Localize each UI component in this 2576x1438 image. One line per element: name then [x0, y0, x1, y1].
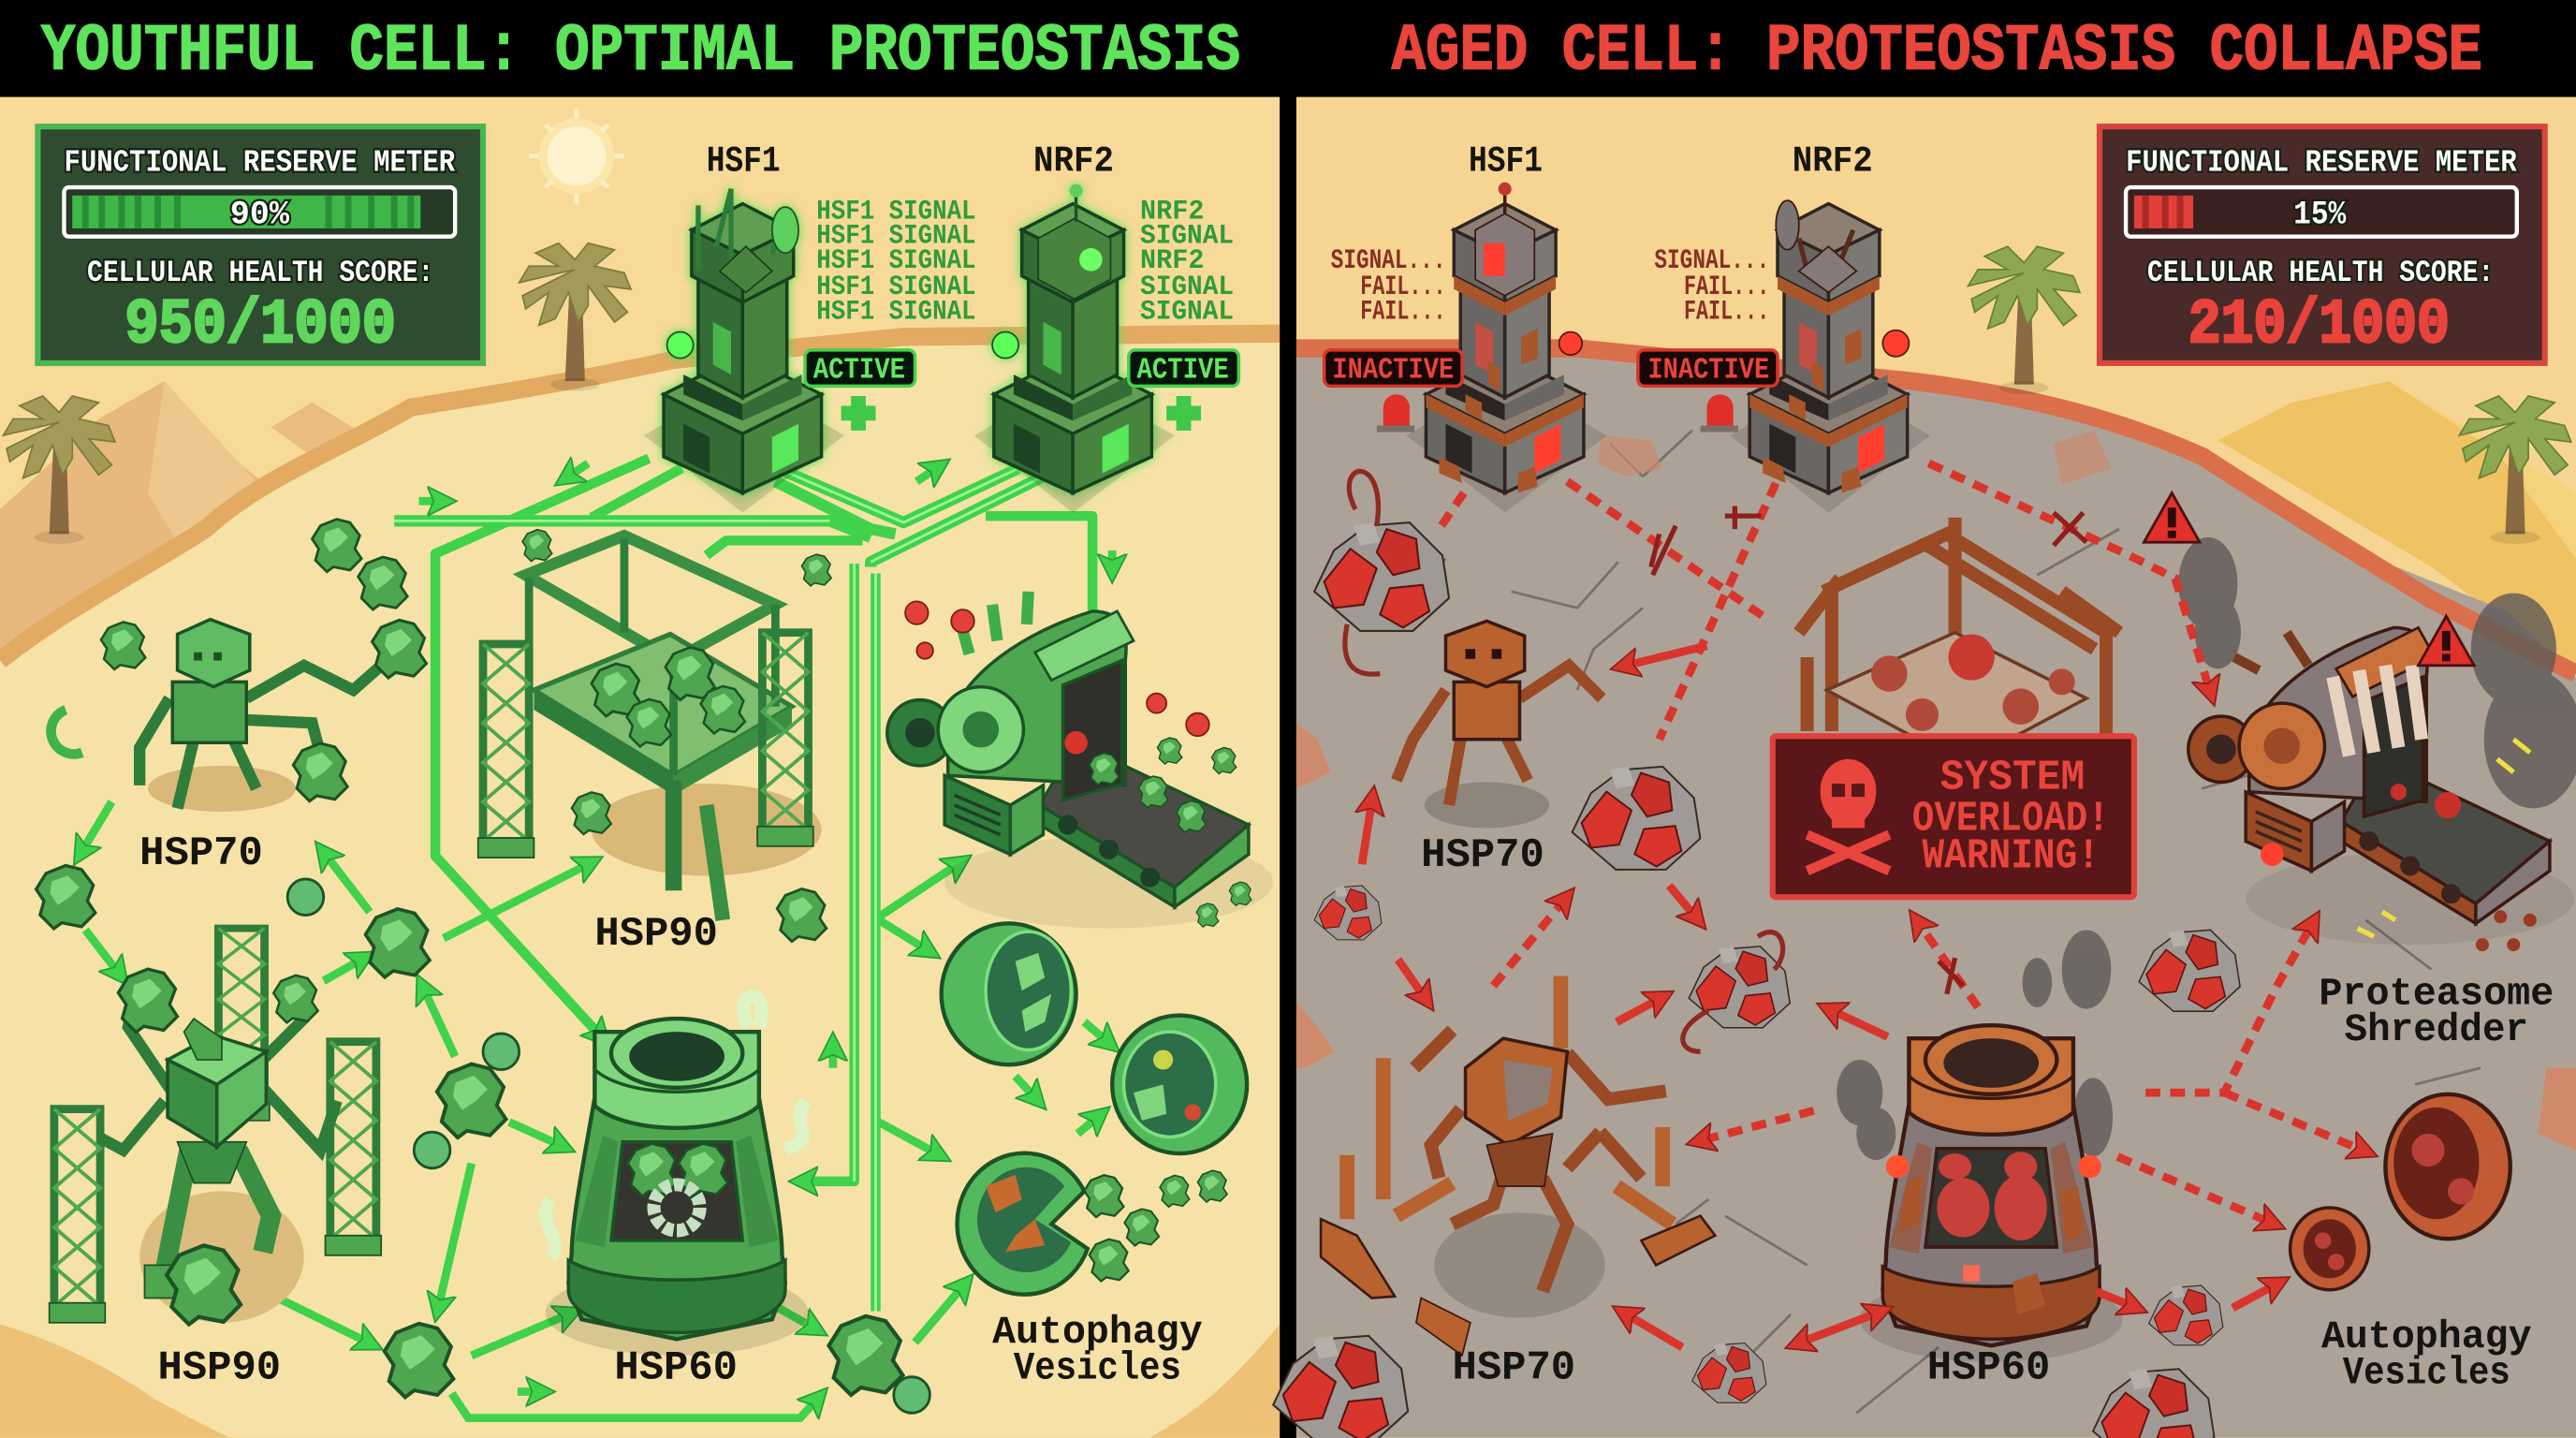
health score label: CELLULAR HEALTH SCORE:: [2147, 256, 2494, 290]
palm trees: right panel: [1969, 246, 2571, 544]
right floor cracks: [1296, 431, 2576, 1413]
text block: HSF1 signal: HSF1 SIGNAL: [816, 244, 976, 276]
robot head: [178, 620, 250, 687]
pipes: youthful signalling network: [394, 459, 1092, 1312]
lamp: [992, 332, 1018, 359]
robot torso: [168, 1019, 266, 1147]
text block: HSF1 signal: HSF1 SIGNAL: [816, 295, 976, 327]
label: Autophagy Vesicles aged: [2321, 1314, 2532, 1396]
label: HSF1 youthful: HSF1: [707, 141, 781, 183]
label: HSP70 upper: HSP70: [1421, 832, 1544, 879]
palm trees: left panel: [4, 243, 631, 544]
lamp: [667, 332, 694, 359]
text block: HSF1 signal: HSF1 SIGNAL: [816, 220, 976, 252]
label: HSP70 lower: HSP70: [1453, 1344, 1575, 1391]
label: HSP60 youthful: HSP60: [614, 1344, 738, 1391]
icon: warning triangle lower: [2419, 616, 2474, 666]
broken gantry: [1347, 976, 1673, 1224]
arrows: aged dashed signals: [1362, 463, 2363, 1347]
protein aggregates: aged: [1273, 471, 2240, 1438]
machine: youthful HSP90 robot: [50, 929, 381, 1325]
escaping proteins: youthful: [1084, 1170, 1227, 1282]
tower: NRF2 youthful: [974, 184, 1175, 513]
warning sign: system overload: [1773, 736, 2134, 897]
vesicle: upper: [942, 923, 1076, 1064]
text block: HSF1 failing signal: [1331, 244, 1445, 327]
robot limbs: [139, 654, 394, 808]
icon: plus HSF1: [842, 396, 875, 431]
meter bar 90%: 90%: [230, 197, 290, 234]
machine: aged HSP60 chamber: [1860, 1025, 2123, 1362]
limbs: [1414, 1030, 1666, 1291]
label: Proteasome Shredder: Shredder: [2345, 1007, 2528, 1052]
meter bar 15%: [2126, 187, 2517, 237]
meter bar 15%: 15%: [2293, 197, 2347, 234]
label: Autophagy Vesicles youthful: [992, 1310, 1203, 1390]
text block: NRF2 signal: NRF2: [1140, 195, 1204, 227]
steam: [546, 996, 805, 1257]
text block: HSF1 signal: [816, 195, 976, 327]
warning text: SYSTEM: [1940, 753, 2085, 801]
icon: sun: [529, 109, 624, 204]
machine: youthful HSP90 scaffold: [478, 530, 831, 942]
label: Autophagy Vesicles aged: Autophagy: [2321, 1314, 2532, 1359]
text block: HSF1 signal: HSF1 SIGNAL: [816, 195, 976, 227]
machine: aged HSP90 scaffold: [1799, 518, 2119, 764]
machine: aged robot lower: [1321, 976, 1715, 1356]
badge: inactive HSF1: INACTIVE: [1332, 355, 1454, 388]
vesicle: aged small: [2291, 1208, 2369, 1290]
misfolded red proteins: [905, 601, 1209, 736]
tower: HSF1 youthful: [644, 189, 844, 513]
label: Proteasome Shredder: Proteasome: [2319, 971, 2554, 1016]
vesicle: right: [1112, 1016, 1247, 1153]
warning text: [1912, 753, 2110, 881]
protein clients: youthful: [37, 866, 929, 1413]
broken link marks: [1651, 506, 2086, 994]
machine: youthful proteasome: [887, 592, 1273, 929]
robot arms and legs: [98, 986, 337, 1151]
health score value: 950/1000: [124, 290, 396, 361]
meter heading: FUNCTIONAL RESERVE METER: [64, 146, 455, 182]
text block: HSF1 failing signal: SIGNAL...: [1331, 244, 1445, 276]
title: youthful cell: YOUTHFUL CELL: OPTIMAL PROTEOSTASIS: [41, 16, 1240, 90]
machine: aged robot upper: [1397, 621, 1602, 829]
antennas: [698, 189, 785, 271]
label: NRF2 youthful: NRF2: [1033, 141, 1114, 183]
icon: alarm HSF1: [1377, 394, 1414, 433]
tower: HSF1 aged: [1406, 183, 1606, 513]
text block: HSF1 failing signal: FAIL...: [1360, 295, 1445, 327]
text block: NRF2 failing signal: FAIL...: [1684, 271, 1769, 302]
badge: active NRF2: ACTIVE: [1137, 355, 1229, 388]
label: HSP90 robot: HSP90: [157, 1344, 281, 1391]
health score label: CELLULAR HEALTH SCORE:: [87, 256, 433, 290]
meter bar 90%: [64, 187, 455, 237]
text block: NRF2 failing signal: FAIL...: [1684, 295, 1769, 327]
tangled chains: [1345, 471, 1783, 1051]
label: Autophagy Vesicles youthful: Vesicles: [1014, 1345, 1181, 1390]
icon: warning triangle upper: [2144, 493, 2200, 542]
text block: NRF2 failing signal: SIGNAL...: [1654, 244, 1769, 276]
label: HSP60 aged: HSP60: [1927, 1344, 2050, 1391]
warning text: OVERLOAD!: [1912, 794, 2110, 843]
text block: NRF2 failing signal: [1654, 244, 1769, 327]
label: HSF1 aged: HSF1: [1469, 141, 1543, 183]
label: Proteasome Shredder: [2319, 971, 2554, 1052]
text block: NRF2 signal: [1140, 195, 1234, 327]
label: NRF2 aged: NRF2: [1793, 141, 1873, 183]
torso: [1466, 1038, 1567, 1186]
text block: HSF1 signal: HSF1 SIGNAL: [816, 271, 976, 302]
text block: NRF2 signal: NRF2: [1140, 244, 1204, 276]
gear: [654, 1184, 700, 1231]
icon: alarm NRF2: [1701, 394, 1738, 433]
text block: HSF1 failing signal: FAIL...: [1360, 271, 1445, 302]
label: HSP70 youthful: HSP70: [139, 830, 263, 877]
right panel background: [1296, 97, 2576, 1438]
panel: right functional reserve: [2100, 126, 2545, 363]
label: Autophagy Vesicles aged: Vesicles: [2343, 1351, 2510, 1396]
meter heading: FUNCTIONAL RESERVE METER: [2126, 146, 2517, 182]
right dunes: [2217, 381, 2576, 674]
left panel background: [0, 97, 1280, 1438]
text block: NRF2 signal: SIGNAL: [1140, 271, 1234, 302]
panel: left functional reserve: [37, 126, 483, 363]
smoke: [1837, 537, 2576, 1160]
left dunes: [0, 381, 374, 666]
label: Autophagy Vesicles youthful: Autophagy: [992, 1310, 1203, 1355]
warning text: WARNING!: [1922, 832, 2100, 881]
arrows: youthful flow: [82, 463, 1112, 1418]
machine: aged shredder: [2188, 627, 2574, 951]
rust patches: [1899, 1177, 2083, 1314]
label: HSP90 scaffold: HSP90: [594, 911, 718, 958]
text block: NRF2 signal: SIGNAL: [1140, 220, 1234, 252]
icon: plus NRF2: [1166, 396, 1201, 431]
badge: inactive NRF2: INACTIVE: [1647, 355, 1769, 388]
vesicle: aged large: [2385, 1094, 2510, 1239]
machine: youthful HSP60 chamber: [546, 996, 809, 1356]
left sand corners: [0, 1325, 1280, 1438]
text block: NRF2 signal: SIGNAL: [1140, 295, 1234, 327]
icon: skull and crossbones: [1808, 759, 1889, 871]
vesicle: engulfing: [958, 1153, 1088, 1295]
badge: active HSF1: ACTIVE: [813, 355, 905, 388]
machine: youthful HSP70 robot: [51, 520, 426, 812]
robot head: [1445, 621, 1525, 687]
towers: aged: [1406, 183, 1930, 513]
health score value: 210/1000: [2188, 290, 2450, 361]
tower: NRF2 aged: [1730, 200, 1930, 513]
